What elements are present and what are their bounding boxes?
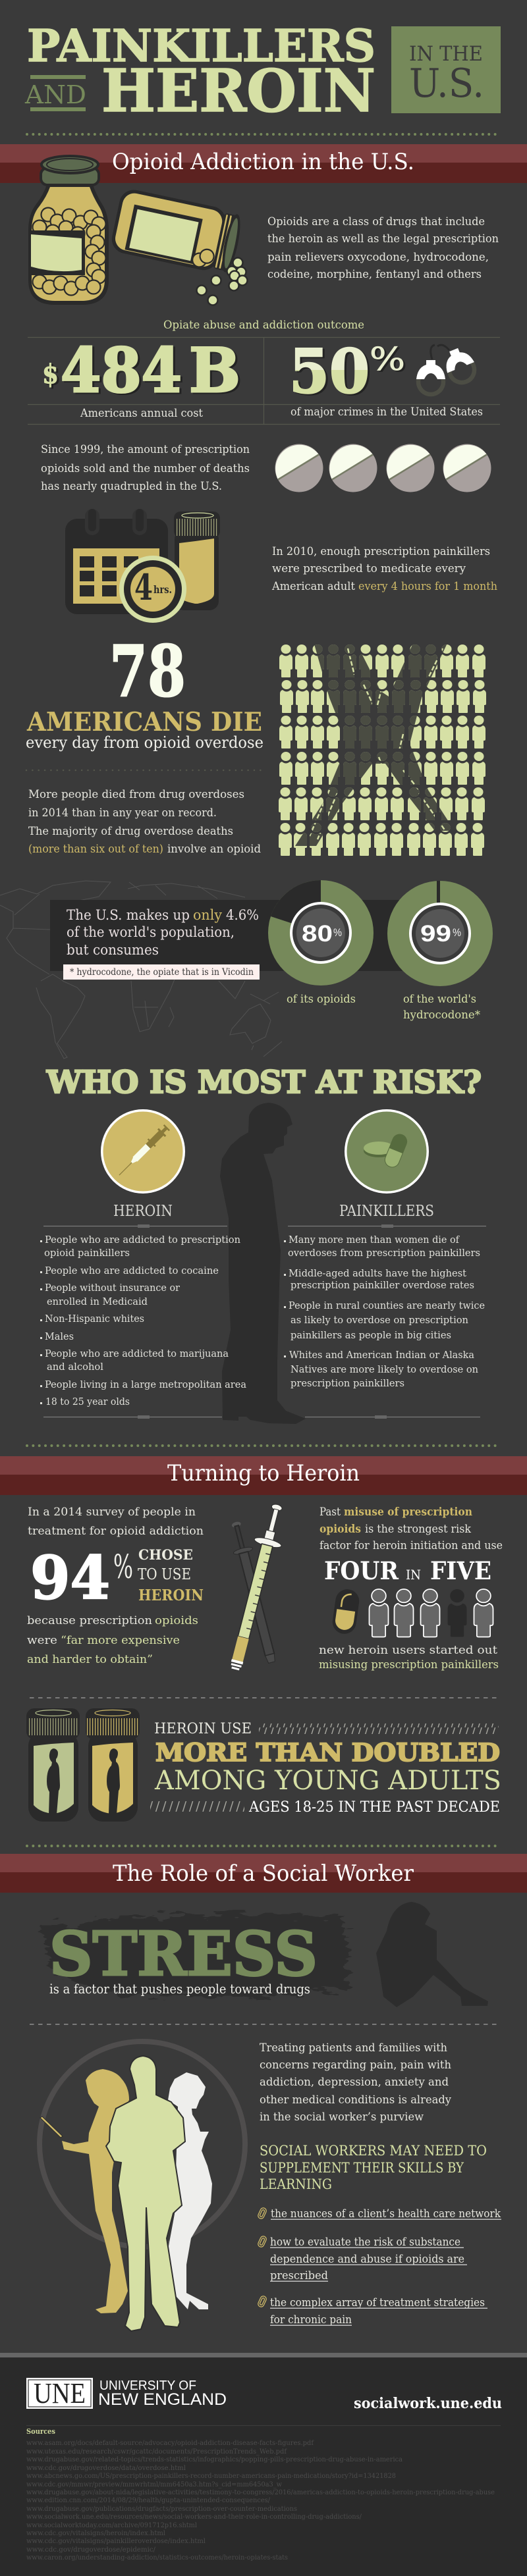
- stat: 484 billion cost: B: [189, 334, 240, 406]
- stat: 484 billion cost: $: [42, 359, 59, 390]
- icon: calendar with vial and 4 hours badge: hrs.: [153, 583, 172, 596]
- text: why heroin: “far more expensive: [61, 1634, 180, 1647]
- logo: University of New England: UNIVERSITY OF: [99, 2379, 196, 2393]
- text: new heroin users: misusing prescription painkillers: [319, 1658, 499, 1671]
- list item: risk evaluation: [257, 2235, 467, 2282]
- list: heroin risk factors: Non-Hispanic whites: [45, 1313, 144, 1325]
- section band: turning to heroin: Turning to Heroin: [167, 1460, 360, 1486]
- caption: of the world's hydrocodone: [403, 993, 480, 1022]
- text: social worker's purview: Treating patients and families with: [260, 2041, 447, 2055]
- chart: 78 people pictogram: [279, 642, 486, 856]
- section band: opioid addiction: Opioid Addiction in the U.S.: [112, 149, 414, 175]
- sources list: www.edition.cnn.com/2014/08/29/health/gupta-unintended-consequences/: [26, 2497, 271, 2504]
- header badge: in the U.S.: U.S.: [409, 61, 484, 107]
- list: painkiller risk factors: People in rural counties are nearly twice: [289, 1300, 485, 1311]
- text: heroin use doubled: [150, 1721, 501, 1816]
- logo: University of New England: NEW ENGLAND: [98, 2390, 227, 2409]
- sources list: www.cdc.gov/drugoverdose/data/overdose.html: [26, 2465, 186, 2472]
- logo: University of New England: UNE: [34, 2377, 86, 2409]
- sources list: www.cdc.gov/drugoverdose/epidemic/: [26, 2546, 156, 2554]
- text: 2014 survey: [28, 1506, 204, 1538]
- text: misuse of prescriptions: Past: [319, 1506, 341, 1519]
- icon: calendar with vial and 4 hours badge: 4: [134, 566, 153, 608]
- section band: opioid addiction: [0, 144, 527, 183]
- stat: 78 Americans die: every day from opioid overdose: [26, 733, 264, 752]
- stat: 94 percent chose heroin: 94: [30, 1543, 110, 1613]
- caption: of the world's hydrocodone: hydrocodone*: [403, 1009, 480, 1022]
- silhouette: seated woman: [376, 1902, 488, 2007]
- section band: role of a social worker: [0, 1854, 527, 1893]
- panel: U.S. consumption: 4.6%: [226, 907, 259, 923]
- stat: 78 Americans die: AMERICANS DIE: [26, 707, 262, 737]
- icon: painkiller pills circle: [345, 1109, 429, 1194]
- text: overdose deaths: (more than six out of ten): [28, 843, 163, 856]
- stat: 78 Americans die: [26, 631, 264, 752]
- stat: 484 billion cost: [42, 334, 240, 406]
- panel: U.S. consumption: of the world's population,: [67, 924, 235, 940]
- text: quadrupled: opioids sold and the number of deaths: [41, 462, 250, 475]
- list: painkiller risk factors: Many more men than women die of: [289, 1234, 460, 1246]
- icon: vial with man, gold: [86, 1708, 140, 1822]
- header badge: in the U.S.: IN THE: [409, 42, 483, 66]
- text: 2010 prescriptions: In 2010, enough prescription painkillers: [272, 545, 490, 558]
- list: painkiller risk factors: painkillers as people in big cities: [291, 1329, 451, 1341]
- stat: 78 Americans die: 78: [109, 631, 186, 713]
- text: new heroin users: new heroin users started out: [319, 1644, 497, 1657]
- list: heroin risk factors: People living in a large metropolitan area: [45, 1379, 246, 1390]
- footer panel: [0, 2353, 527, 2576]
- sources list: www.abcnews.go.com/US/prescription-painkillers-record-number-americans-pain-medication/story?id=13421828: [26, 2473, 396, 2480]
- chart: donut 80 percent: %: [333, 926, 342, 939]
- icon: tipped pill bottle with spilled pills: [109, 187, 248, 305]
- decorative world map outline: [0, 881, 282, 1059]
- caption: of the world's hydrocodone: of the world's: [403, 993, 476, 1006]
- header title: AND: [24, 80, 86, 109]
- sources list: www.utexas.edu/research/cswr/gcattc/documents/PrescriptionTrends_Web.pdf: [26, 2448, 287, 2456]
- sources list: www.cdc.gov/mmwr/preview/mmwrhtml/mm6450a3.htm?s_cid=mm6450a3_w: [26, 2481, 282, 2488]
- heading: heroin risk: HEROIN: [113, 1203, 173, 1220]
- list: heroin risk factors: 18 to 25 year olds: [45, 1396, 130, 1407]
- list: heroin risk factors: People who are addicted to cocaine: [45, 1265, 219, 1276]
- icon: calendar with vial and 4 hours badge: [65, 509, 220, 623]
- list: painkiller risk factors: Whites and American Indian or Alaska: [289, 1349, 474, 1361]
- heading: painkillers risk: PAINKILLERS: [339, 1203, 434, 1220]
- illustration: social workers in ring: [40, 2041, 245, 2331]
- text: social worker's purview: concerns regarding pain, pain with: [260, 2059, 451, 2072]
- text: opioids definition: pain relievers oxycodone, hydrocodone,: [267, 251, 489, 264]
- list: painkiller risk factors: overdoses from prescription painkillers: [288, 1247, 480, 1259]
- text: misuse of prescriptions: is the strongest risk: [365, 1523, 472, 1536]
- chart: donut 80 percent: 80: [302, 921, 333, 947]
- silhouette: bowed man: [220, 1103, 306, 1424]
- sources list: [26, 2427, 495, 2562]
- header title: PAINKILLERS: [27, 20, 375, 72]
- sources list: www.drugabuse.gov/publications/drugfacts/prescription-over-counter-medications: [26, 2506, 297, 2513]
- stat: 94 percent chose heroin: [30, 1543, 204, 1613]
- text: 2010 prescriptions: American adult: [271, 580, 355, 593]
- icon: crossed syringes: [222, 1501, 291, 1673]
- chart: donut 99 percent: [387, 881, 493, 986]
- heading: supplement skills: LEARNING: [260, 2176, 332, 2192]
- section band: role of a social worker: The Role of a Social Worker: [113, 1860, 414, 1887]
- logo: University of New England: [26, 2377, 227, 2409]
- heading: who is most at risk: WHO IS MOST AT RISK?: [46, 1065, 482, 1101]
- header badge: in the U.S.: [391, 26, 501, 113]
- note: hydrocodone: [63, 964, 260, 980]
- caption: annual cost: Americans annual cost: [80, 407, 203, 420]
- stat: four in five: [324, 1556, 491, 1585]
- panel: U.S. consumption: The U.S. makes up: [67, 907, 190, 923]
- list: heroin risk factors: People who are addicted to prescription: [45, 1234, 240, 1246]
- note: hydrocodone: * hydrocodone, the opiate that is in Vicodin: [70, 967, 254, 978]
- text: 2014 survey: treatment for opioid addiction: [28, 1525, 204, 1538]
- heading: supplement skills: [260, 2143, 487, 2192]
- text: misuse of prescriptions: factor for heroin initiation and use: [319, 1539, 503, 1552]
- text: heroin use doubled: AMONG YOUNG ADULTS: [154, 1766, 501, 1796]
- text: quadrupled: [41, 443, 250, 493]
- list item: health care network: the nuances of a client’s health care network: [271, 2207, 501, 2221]
- stat: 50 percent: %: [370, 341, 405, 378]
- text: misuse of prescriptions: opioids: [319, 1523, 361, 1536]
- text: new heroin users: [319, 1644, 499, 1671]
- text: quadrupled: has nearly quadrupled in the U.S.: [41, 480, 222, 493]
- sources list: Sources: [26, 2427, 55, 2436]
- stat: four in five: FOUR: [324, 1556, 399, 1585]
- list item: risk evaluation: dependence and abuse if opioids are: [270, 2253, 464, 2266]
- stat: 94 percent chose heroin: CHOSE: [138, 1546, 193, 1563]
- texture: brush strokes behind stress: [41, 1912, 349, 1997]
- section band: turning to heroin: [0, 1456, 527, 1495]
- sources list: www.drugabuse.gov/about-nida/legislative-activities/testimony-to-congress/2016/americas-addiction-to-opioids-heroin-prescription-drug-abuse: [26, 2489, 495, 2496]
- list: heroin risk factors: People without insurance or: [45, 1282, 180, 1294]
- header title: HEROIN: [101, 56, 375, 125]
- text: overdose deaths: More people died from drug overdoses: [28, 788, 244, 801]
- sources list: www.cdc.gov/vitalsigns/heroin/index.html: [26, 2530, 165, 2537]
- text: stress factor: is a factor that pushes people toward drugs: [49, 1981, 310, 1997]
- chart: donut 80 percent: [268, 880, 374, 986]
- panel: U.S. consumption: [50, 900, 403, 971]
- heading: supplement skills: SUPPLEMENT THEIR SKILLS BY: [260, 2160, 464, 2176]
- text: why heroin: and harder to obtain”: [27, 1653, 153, 1666]
- icon: capsule: [331, 1588, 361, 1635]
- list: heroin risk factors: Males: [45, 1330, 74, 1342]
- icon: vial with man, pale: [26, 1708, 80, 1822]
- list item: treatment strategies: the complex array of treatment strategies: [270, 2296, 485, 2309]
- text: overdose deaths: [28, 788, 261, 856]
- text: social worker's purview: addiction, depression, anxiety and: [260, 2076, 449, 2089]
- list: painkiller risk factors: [284, 1234, 485, 1389]
- caption: major crimes: of major crimes in the United States: [291, 406, 483, 419]
- panel: U.S. consumption: only: [193, 907, 222, 923]
- text: social worker's purview: [260, 2041, 451, 2124]
- list: painkiller risk factors: Middle-aged adults have the highest: [289, 1267, 466, 1279]
- list: painkiller risk factors: prescription painkiller overdose rates: [291, 1279, 474, 1291]
- text: quadrupled: Since 1999, the amount of prescription: [41, 443, 250, 456]
- chart: five people, four highlighted: [369, 1589, 493, 1637]
- list: painkiller risk factors: Natives are more likely to overdose on: [291, 1363, 478, 1375]
- list: heroin risk factors: People who are addicted to marijuana: [45, 1348, 229, 1359]
- text: 2010 prescriptions: every 4 hours for 1 month: [358, 580, 497, 593]
- list: heroin risk factors: enrolled in Medicaid: [47, 1296, 148, 1307]
- text: misuse of prescriptions: [319, 1506, 503, 1552]
- text: 2014 survey: In a 2014 survey of people in: [28, 1506, 196, 1519]
- text: heroin use doubled: MORE THAN DOUBLED: [155, 1738, 500, 1767]
- text: why heroin: because prescription: [27, 1614, 152, 1627]
- stat: four in five: IN: [406, 1567, 421, 1583]
- sources list: www.socialwork.une.edu/resources/news/social-workers-and-their-role-in-controlling-drug-addictions/: [26, 2513, 362, 2521]
- chart: donut 99 percent: %: [453, 926, 461, 939]
- text: 2010 prescriptions: [271, 545, 497, 593]
- sources list: www.caron.org/understanding-addiction/statistics-outcomes/heroin-opiates-stats: [26, 2554, 288, 2562]
- text: overdose deaths: involve an opioid: [167, 843, 261, 856]
- list: heroin risk factors: and alcohol: [47, 1361, 103, 1373]
- text: social worker's purview: other medical conditions is already: [260, 2093, 451, 2107]
- sources list: www.socialworktoday.com/archive/091712p16.shtml: [26, 2522, 197, 2529]
- stat: 94 percent chose heroin: HEROIN: [138, 1587, 204, 1604]
- list: heroin risk factors: opioid painkillers: [44, 1247, 130, 1259]
- heading: supplement skills: SOCIAL WORKERS MAY NEED TO: [260, 2143, 487, 2159]
- list: painkiller risk factors: as likely to overdose on prescription: [291, 1314, 468, 1326]
- list item: risk evaluation: prescribed: [270, 2269, 328, 2282]
- website url: socialwork.une.edu: [354, 2395, 502, 2412]
- heading: stress: STRESS: [49, 1918, 318, 1989]
- text: overdose deaths: in 2014 than in any year on record.: [28, 806, 217, 820]
- text: social worker's purview: in the social worker’s purview: [260, 2111, 424, 2124]
- sources list: www.cdc.gov/vitalsigns/painkilleroverdose/index.html: [26, 2538, 206, 2545]
- text: heroin use doubled: AGES 18-25 IN THE PAST DECADE: [248, 1799, 500, 1816]
- text: misuse of prescriptions: misuse of prescription: [344, 1506, 472, 1519]
- panel: U.S. consumption: but consumes: [67, 942, 159, 958]
- icon: handcuffs: [416, 344, 480, 394]
- heading: outcome: Opiate abuse and addiction outcome: [163, 319, 364, 332]
- chart: donut 99 percent: 99: [420, 921, 451, 947]
- text: why heroin: opioids: [155, 1614, 198, 1627]
- icon: heroin syringe circle: [101, 1109, 185, 1194]
- list item: risk evaluation: how to evaluate the risk of substance: [270, 2236, 460, 2249]
- list: heroin risk factors: [40, 1234, 246, 1407]
- list item: treatment strategies: [257, 2295, 487, 2326]
- text: heroin use doubled: HEROIN USE: [154, 1721, 252, 1737]
- header title: [24, 20, 375, 125]
- text: opioids definition: the heroin as well as the legal prescription: [267, 232, 499, 246]
- list item: treatment strategies: for chronic pain: [270, 2313, 352, 2326]
- text: why heroin: were: [27, 1634, 57, 1647]
- stat: 94 percent chose heroin: TO USE: [138, 1566, 191, 1583]
- text: why heroin: [27, 1614, 198, 1666]
- text: opioids definition: [267, 215, 499, 281]
- text: 2010 prescriptions: were prescribed to medicate every: [272, 562, 466, 575]
- sources list: www.asam.org/docs/default-source/advocacy/opioid-addiction-disease-facts-figures.pdf: [26, 2440, 314, 2447]
- text: overdose deaths: The majority of drug overdose deaths: [28, 825, 233, 838]
- stat: 94 percent chose heroin: %: [113, 1548, 133, 1586]
- caption: of its opioids: of its opioids: [287, 993, 356, 1006]
- text: opioids definition: Opioids are a class of drugs that include: [267, 215, 485, 228]
- text: opioids definition: codeine, morphine, fentanyl and others: [267, 268, 482, 281]
- list: painkiller risk factors: prescription painkillers: [291, 1377, 404, 1389]
- stat: four in five: FIVE: [430, 1556, 491, 1585]
- stat: 50 percent: 50: [289, 336, 370, 407]
- sources list: www.drugabuse.gov/related-topics/trends-statistics/infographics/popping-pills-prescription-drug-abuse-in-america: [26, 2456, 402, 2463]
- stat: 484 billion cost: 484: [61, 334, 182, 406]
- icon: four split pills: [275, 444, 491, 492]
- icon: upright pill bottle: [28, 156, 109, 305]
